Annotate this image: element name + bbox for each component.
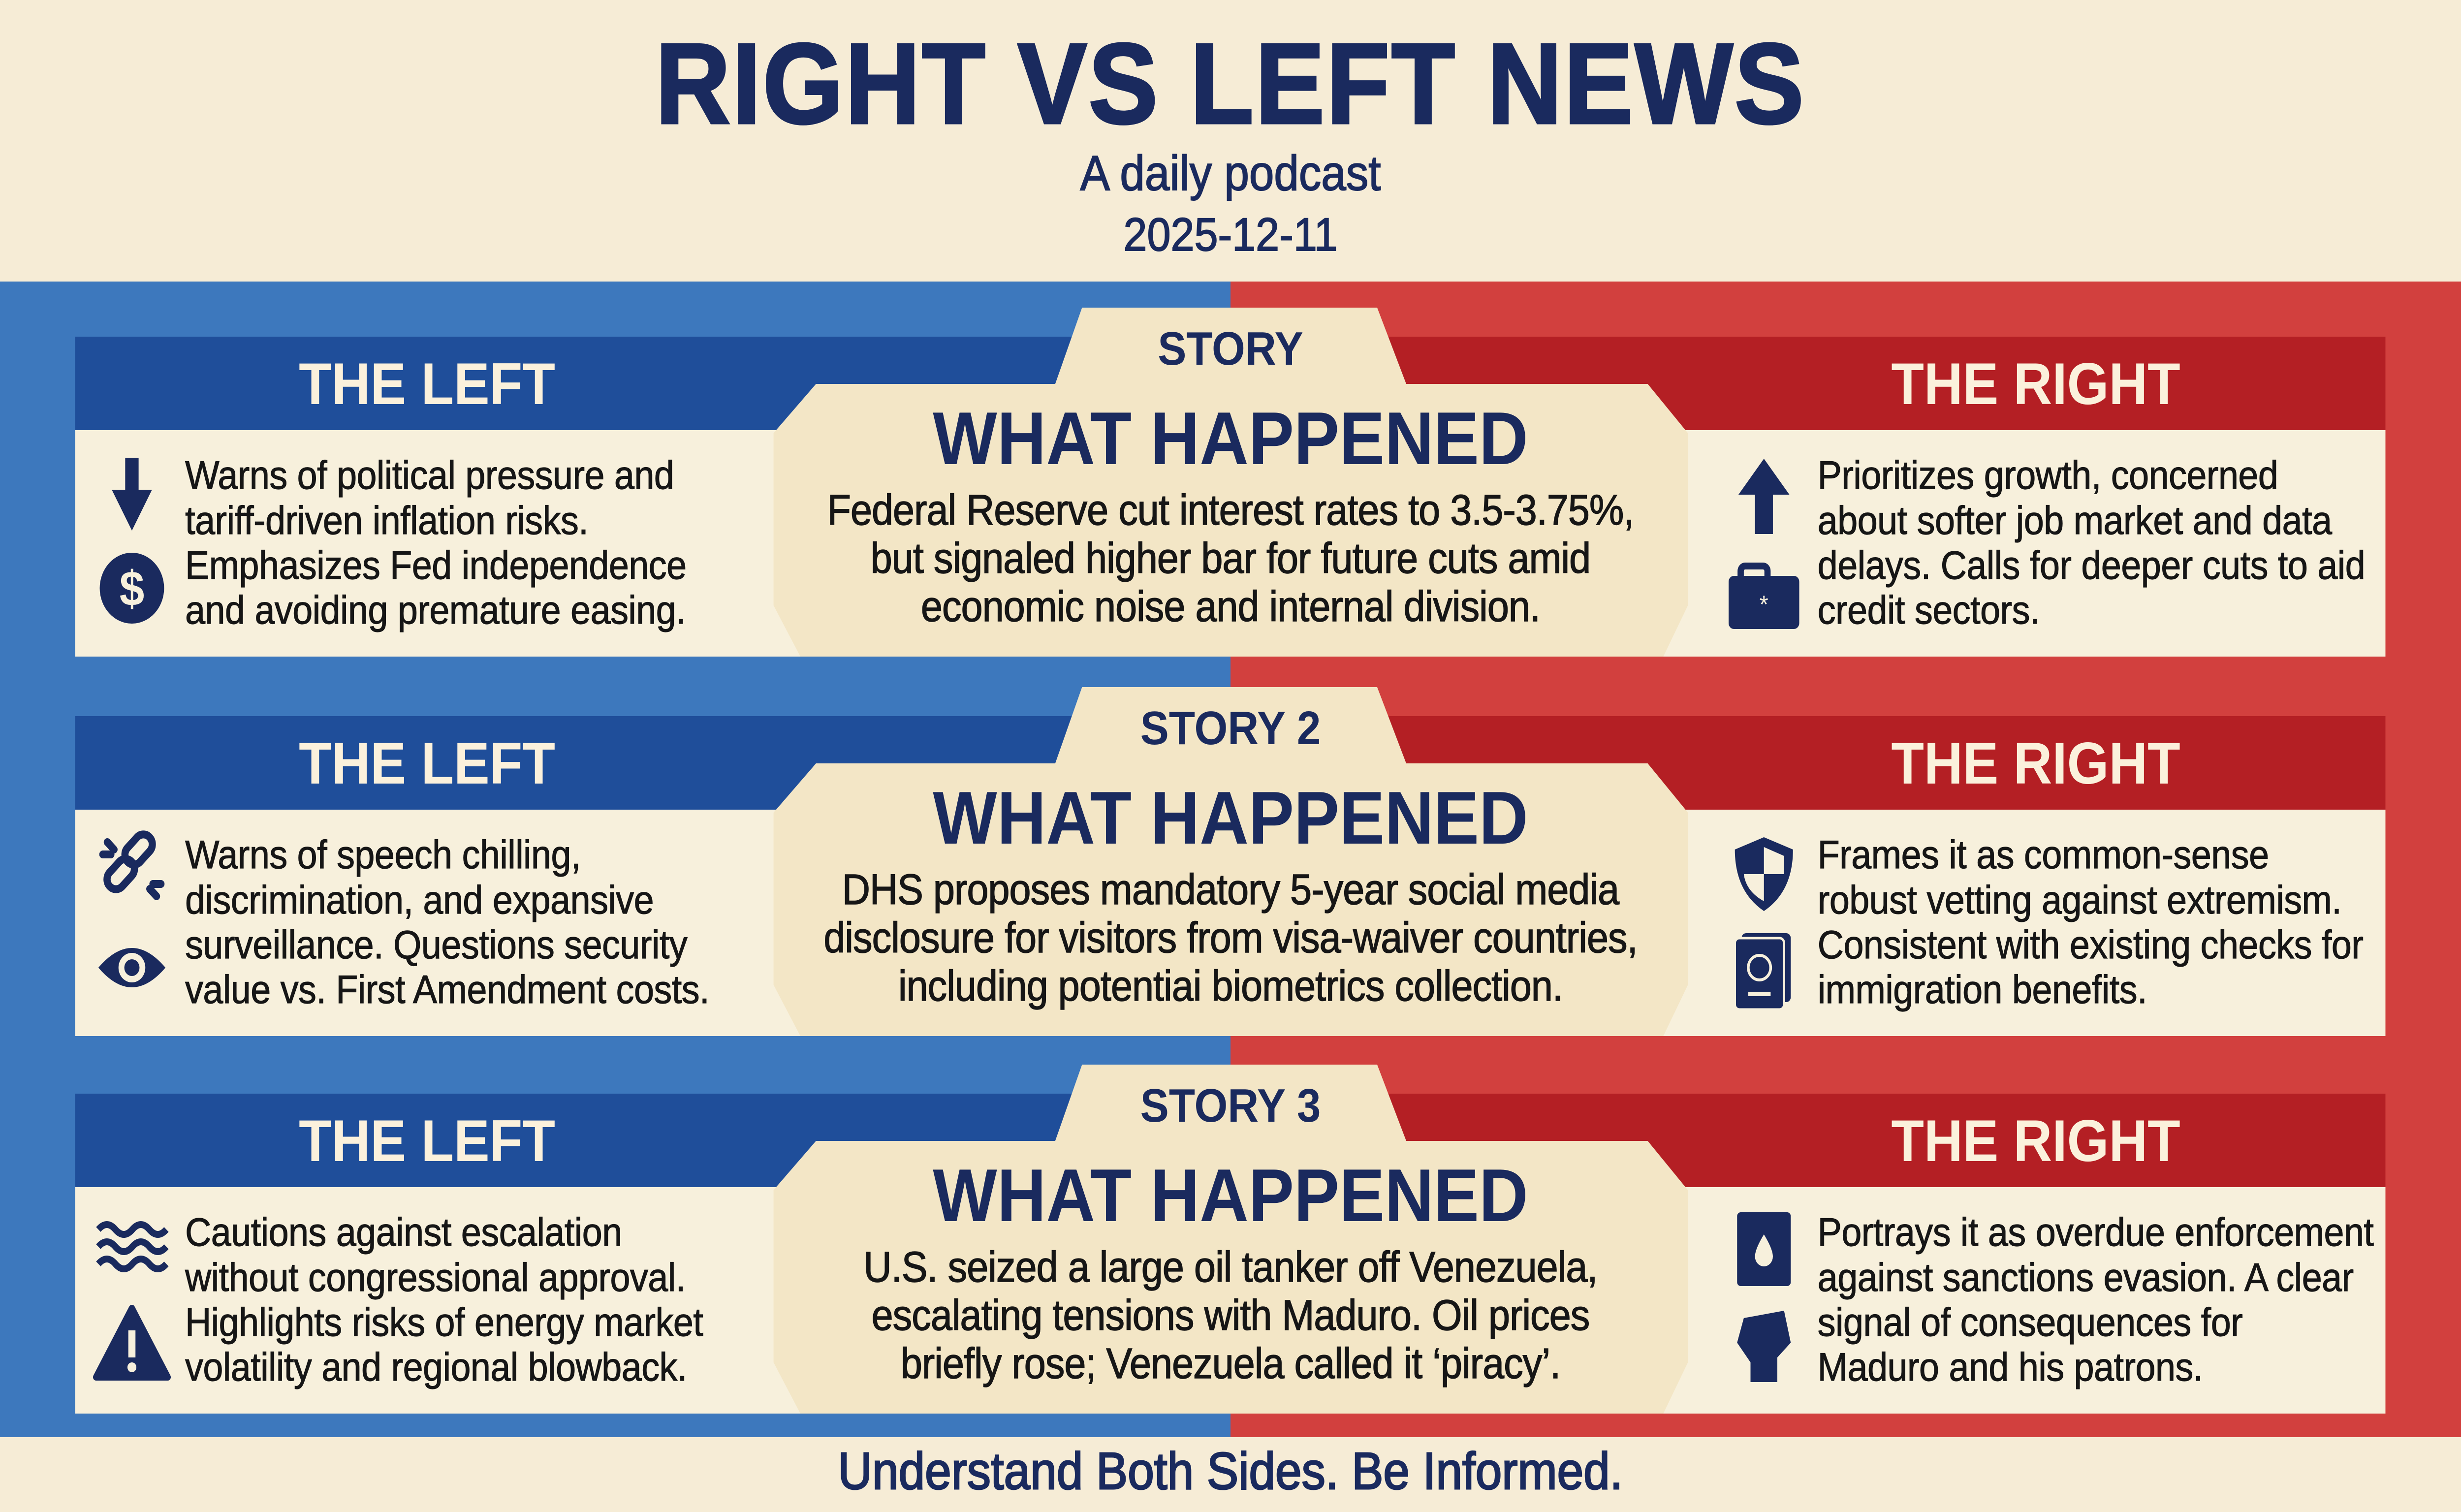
row: story 1: [75, 308, 2385, 657]
text: right view 2: Consistent with existing checks for: [1818, 923, 2363, 967]
center panel: story 1: economic noise and internal division.: [921, 582, 1540, 630]
center panel: story 1: Federal Reserve cut interest rates to 3.5-3.75%,: [827, 486, 1634, 534]
date: 2025-12-11: [1123, 209, 1338, 261]
center panel: story 3: WHAT HAPPENED: [933, 1154, 1528, 1237]
text: right view 1: delays. Calls for deeper cuts to aid: [1818, 543, 2365, 588]
icon: broken link: [103, 830, 161, 896]
text: right view 2: immigration benefits.: [1818, 968, 2147, 1012]
text: right view 1: about softer job market and data: [1818, 499, 2333, 543]
icon: briefcase: [1729, 566, 1799, 629]
title: RIGHT VS LEFT NEWS: [656, 20, 1805, 147]
heading: the right: THE RIGHT: [1891, 730, 2180, 796]
subtitle: A daily podcast: [1080, 146, 1381, 201]
text: left view 1: tariff-driven inflation risks.: [185, 499, 588, 543]
center panel: story 2: STORY 2: [1140, 702, 1321, 755]
text: right view 2: Frames it as common-sense: [1818, 833, 2269, 877]
center panel: story 2: including potentiai biometrics collection.: [898, 962, 1563, 1010]
center panel: story 1: but signaled higher bar for future cuts amid: [871, 534, 1590, 582]
text: right view 3: Portrays it as overdue enforcement: [1818, 1210, 2373, 1255]
center panel: story 2: [774, 687, 1688, 1036]
background band: left blue: [0, 282, 1230, 1437]
text: left view 2: value vs. First Amendment costs.: [185, 968, 709, 1012]
center panel: story 3: STORY 3: [1140, 1079, 1321, 1132]
text: right view 1: credit sectors.: [1818, 588, 2040, 632]
center panel: story 2: DHS proposes mandatory 5-year social media: [842, 865, 1620, 914]
center panel: story 1: [774, 308, 1688, 657]
text: left view 2: discrimination, and expansive: [185, 878, 654, 922]
heading: the left: THE LEFT: [299, 730, 555, 796]
icon: shield: [1735, 837, 1793, 911]
icon: oil barrel: [1737, 1212, 1791, 1286]
text: right view 3: Maduro and his patrons.: [1818, 1345, 2203, 1389]
text: right view 1: Prioritizes growth, concerned: [1818, 453, 2278, 498]
center panel: story 2: WHAT HAPPENED: [933, 776, 1528, 859]
center panel: story 1: STORY: [1158, 322, 1303, 375]
text: left view 3: without congressional approval.: [185, 1256, 686, 1300]
heading: the right: THE RIGHT: [1891, 1108, 2180, 1174]
heading: the left: THE LEFT: [299, 1108, 555, 1174]
row: story 2: [75, 687, 2385, 1036]
icon: passport: [1735, 933, 1791, 1009]
icon: warning: [96, 1308, 168, 1377]
icon: dollar: [100, 553, 164, 624]
text: left view 3: Highlights risks of energy market: [185, 1300, 703, 1345]
heading: the right: THE RIGHT: [1891, 351, 2180, 417]
text: left view 1: Emphasizes Fed independence: [185, 543, 687, 588]
row: story 3: [75, 1065, 2385, 1414]
text: left view 3: Cautions against escalation: [185, 1210, 622, 1255]
center panel: story 3: briefly rose; Venezuela called it ‘piracy’.: [901, 1339, 1560, 1387]
text: left view 1: Warns of political pressure and: [185, 453, 674, 498]
center panel: story 3: [774, 1065, 1688, 1414]
text: left view 1: and avoiding premature easing.: [185, 588, 686, 632]
text: left view 3: volatility and regional blowback.: [185, 1345, 687, 1389]
icon: down arrow: [112, 458, 152, 531]
icon: dollar: $: [120, 562, 144, 616]
tagline: Understand Both Sides. Be Informed.: [838, 1442, 1623, 1500]
heading: the left: THE LEFT: [299, 351, 555, 417]
text: left view 2: Warns of speech chilling,: [185, 833, 581, 877]
center panel: story 1: WHAT HAPPENED: [933, 397, 1528, 480]
text: right view 3: signal of consequences for: [1818, 1300, 2242, 1345]
icon: up arrow: [1738, 459, 1790, 534]
icon: briefcase: *: [1760, 591, 1768, 619]
text: left view 2: surveillance. Questions security: [185, 923, 688, 967]
icon: eye: [98, 948, 165, 987]
center panel: story 3: U.S. seized a large oil tanker off Venezuela,: [864, 1243, 1597, 1291]
center panel: story 2: disclosure for visitors from visa-waiver countries,: [823, 914, 1638, 962]
icon: waves: [98, 1225, 166, 1269]
center panel: story 3: escalating tensions with Maduro. Oil prices: [872, 1291, 1589, 1339]
text: right view 3: against sanctions evasion. A clear: [1818, 1256, 2354, 1300]
text: right view 2: robust vetting against extremism.: [1818, 878, 2341, 922]
icon: raised fist: [1737, 1311, 1791, 1382]
background band: right red: [1230, 282, 2461, 1437]
